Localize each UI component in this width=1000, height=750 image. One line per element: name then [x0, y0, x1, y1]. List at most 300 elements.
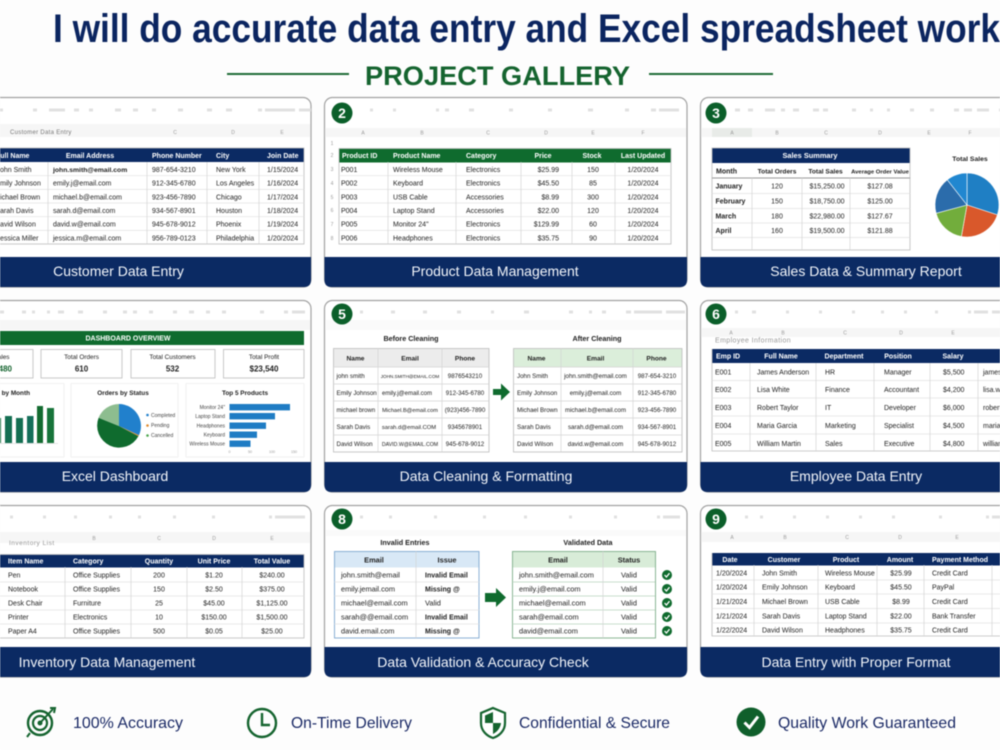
table: customers: michael.b@email.com [53, 194, 122, 201]
table: inventory: Paper A4 [8, 629, 37, 636]
pie chart: orders by status [71, 384, 178, 457]
table: employees: Developer [884, 405, 917, 412]
table: employees: Marketing [825, 423, 856, 430]
column letters: A [729, 330, 733, 336]
KPI cards: Total Orders [64, 354, 99, 361]
column letters and row numbers: 4 [331, 181, 334, 187]
table: sales summary: $18,750.00 [809, 198, 845, 206]
table: employees: $4,200 [943, 387, 965, 394]
bar chart: top 5 products [186, 384, 304, 457]
column letters: B [781, 330, 785, 336]
headings invalid and validated: Validated Data [563, 538, 614, 547]
table: inventory: $1.20 [205, 573, 223, 580]
table: products: Stock [582, 153, 602, 160]
table: products: Accessories [466, 194, 504, 201]
headings before and after: After Cleaning [572, 334, 622, 343]
table: orders: Sarah Davis [762, 614, 801, 621]
table: after cleaning: Email [587, 356, 604, 362]
headings before and after: Before Cleaning [383, 334, 439, 343]
table: inventory: Total Value [254, 558, 290, 566]
caption band [700, 462, 1000, 492]
table: employees: $4,800 [943, 441, 965, 448]
table: orders: Bank Transfer [932, 614, 976, 621]
icon: clock [248, 709, 276, 737]
table: customers: Philadelphia [216, 235, 254, 242]
table: validated data: Status [618, 556, 640, 564]
table: invalid entries: Issue [438, 556, 456, 564]
feature: 100% accuracy: 100% Accuracy [73, 715, 183, 732]
table: validated data: michael@email.com [519, 599, 586, 608]
table: inventory: Electronics [73, 615, 108, 622]
table: sales summary: Month [716, 168, 737, 176]
table: validated data: Valid [621, 627, 637, 636]
caption band [0, 647, 311, 677]
table: invalid entries: david.email.com [341, 627, 394, 636]
number badge 6 [706, 304, 726, 324]
table: customers: 945-678-9012 [152, 222, 196, 229]
table: customers: 923-456-7890 [152, 194, 196, 201]
table: employees: Executive [884, 441, 914, 448]
icon: target [27, 708, 55, 737]
table: inventory: $1,125.00 [256, 601, 288, 608]
column letters and row numbers: D [544, 130, 548, 136]
table: sales summary: 150 [771, 198, 783, 206]
table: before cleaning: JOHN.SMITH@EMAIL.COM [381, 374, 439, 379]
column letters [730, 130, 972, 136]
feature: 100% accuracy [27, 708, 183, 737]
table: orders: Michael Brown [762, 599, 808, 606]
table: products: P006 [341, 235, 357, 242]
column letters and row numbers: 8 [331, 236, 334, 242]
table: orders: Headphones [825, 628, 865, 635]
caption band: Data Cleaning & Formatting [400, 468, 572, 484]
table: orders: Payment Method [932, 557, 988, 564]
caption band [700, 647, 1000, 677]
table: sales summary: Sales Summary [782, 151, 838, 160]
table: before cleaning: emily.j@email.com [382, 391, 432, 397]
table: products: 1/20/2024 [627, 235, 659, 242]
feature: quality work guaranteed [736, 708, 956, 736]
table: products: Monitor 24" [393, 222, 429, 229]
table: employees: Salary [942, 354, 964, 360]
pie chart: orders by status: Completed [151, 413, 175, 419]
table: customers: New York [216, 167, 246, 174]
feature: on-time delivery: On-Time Delivery [291, 715, 412, 732]
table: employees: Manager [884, 370, 912, 377]
table: sales summary [712, 148, 910, 250]
table: products: Electronics [466, 181, 501, 188]
table: customers: Houston [216, 208, 242, 215]
table: employees: William Martin [757, 441, 801, 448]
table: products: P005 [341, 222, 357, 229]
bar chart: top 5 products: 150 [291, 450, 297, 454]
table: before cleaning: 9345678901 [448, 424, 483, 431]
table: customers: Phone Number [152, 153, 202, 160]
table: products: Price [534, 153, 552, 160]
column letters: D [231, 130, 235, 136]
caption band [700, 257, 1000, 287]
table: customers: 1/20/2024 [267, 235, 298, 242]
KPI cards: Total Customers [149, 354, 196, 361]
feature: confidential and secure [481, 708, 670, 738]
table: inventory: Printer [8, 615, 29, 622]
column letters and row numbers: B [420, 130, 424, 136]
table: employees: Emp ID [716, 354, 740, 360]
table: orders: 1/22/2024 [716, 628, 747, 635]
table: products: 85 [589, 181, 597, 188]
table: invalid entries: Valid [425, 599, 441, 608]
arrow: before to after [493, 384, 510, 400]
table: employees: Maria Garcia [757, 423, 797, 430]
table: inventory: Pen [8, 573, 21, 580]
panel: employee data entry [700, 300, 1000, 492]
column letters and row numbers: 2 [331, 153, 334, 159]
table: products: Product Name [393, 153, 441, 160]
table: orders: $8.99 [892, 599, 910, 606]
table: products: 1/20/2024 [627, 208, 659, 215]
table: inventory: Notebook [8, 587, 38, 594]
table: products: $8.99 [541, 194, 559, 201]
table: orders: John Smith [762, 571, 797, 578]
bar chart: top 5 products: 0 [228, 450, 230, 454]
table: customers: sarah.d@email.com [53, 208, 116, 215]
table: employees: Accountant [884, 387, 919, 394]
caption band: Customer Data Entry [53, 263, 184, 279]
table: customers: 934-567-8901 [152, 208, 196, 215]
column letters and row numbers: C [486, 130, 490, 136]
table: products: Electronics [466, 222, 501, 229]
column letters and row numbers: 7 [331, 222, 334, 228]
table: employees: Lisa White [757, 387, 790, 394]
table: orders: Amount [887, 557, 914, 564]
number badge 2: 2 [338, 105, 346, 121]
table: orders: Product [833, 557, 860, 564]
table: after cleaning: 934-567-8901 [638, 424, 677, 431]
table: customers: 1/18/2024 [267, 208, 298, 215]
table: before cleaning: Sarah Davis [336, 424, 370, 431]
caption band [324, 462, 687, 492]
table: inventory: Office Supplies [73, 573, 120, 580]
bar chart: top 5 products: 100 [269, 450, 275, 454]
column letters: C [824, 130, 828, 136]
table: after cleaning: John Smith [517, 373, 549, 380]
number badge 3 [706, 102, 726, 124]
table: customers: Join Date [267, 153, 299, 160]
table: employees: James Anderson [757, 370, 809, 377]
column letters: B [783, 535, 787, 541]
table: after cleaning: john.smith@email.com [563, 373, 627, 380]
column letters: C [173, 130, 177, 136]
table: products: P001 [341, 167, 357, 174]
table: employees: E003 [715, 405, 731, 412]
column letters and row numbers: 1 [331, 141, 334, 147]
table: orders: Wireless Mouse [825, 571, 875, 578]
column letters and row numbers: 5 [331, 195, 334, 201]
pie chart: orders by status: Pending [151, 423, 170, 429]
table: products: Category [466, 153, 496, 160]
table: customers: 912-345-6780 [152, 181, 196, 188]
table: inventory: $25.00 [261, 629, 283, 636]
column letters: A [730, 130, 734, 136]
table: customers: jessica.m@email.com [52, 235, 121, 242]
caption band: Employee Data Entry [790, 468, 922, 484]
table: before cleaning [334, 348, 489, 452]
table: employees: $6,000 [943, 405, 965, 412]
table: sales summary: Average Order Value [851, 170, 910, 176]
table: customers [0, 148, 304, 244]
table: customers: 956-789-0123 [152, 235, 196, 242]
sheet name: Customer Data Entry [10, 130, 72, 136]
table: before cleaning: DAVID.W@EMAIL.COM [382, 442, 438, 448]
table: employees: Position [884, 354, 912, 360]
table: validated data: Valid [621, 599, 637, 608]
table: inventory: Item Name [8, 558, 44, 566]
section heading: project gallery: PROJECT GALLERY [365, 61, 630, 91]
table: products: $129.99 [534, 222, 559, 229]
panel: sales data and summary report [700, 98, 1000, 287]
table: before cleaning: (923)456-7890 [445, 407, 486, 414]
table: before cleaning: Emily Johnson [336, 390, 377, 397]
pie chart: orders by status: Orders by Status [97, 390, 149, 397]
column letters: B [92, 536, 96, 542]
table: inventory: 500 [153, 629, 165, 636]
table: customers: david.w@email.com [53, 222, 116, 229]
table: after cleaning: Name [528, 356, 546, 362]
table: validated data: sarah@email.com [519, 613, 579, 622]
table: inventory [0, 554, 304, 638]
caption band: Data Entry with Proper Format [761, 654, 951, 670]
table: inventory: $45.00 [203, 601, 225, 608]
table: employees: E001 [715, 370, 731, 377]
column letters: D [899, 330, 903, 336]
table: inventory: 200 [153, 573, 165, 580]
KPI cards: $23,540 [250, 364, 279, 374]
table: before cleaning: Phone [455, 356, 475, 362]
table: products: Keyboard [393, 181, 423, 188]
table: validated data: emily.j@email.com [519, 585, 581, 594]
table: before cleaning: michael brown [336, 408, 375, 414]
table: products: 1/20/2024 [627, 167, 659, 174]
table: products: Laptop Stand [393, 208, 435, 215]
feature: confidential and secure: Confidential & Secure [519, 715, 670, 732]
table: after cleaning: michael.b@email.com [565, 407, 626, 414]
pie chart: total sales: Total Sales [952, 156, 988, 163]
number badge 5: 5 [338, 306, 346, 322]
KPI cards [0, 350, 304, 378]
table: orders [712, 553, 1000, 636]
number badge 9 [706, 508, 726, 530]
bar chart: sales by month [0, 384, 64, 457]
table: sales summary: $125.00 [867, 198, 893, 206]
panel: data cleaning and formatting [324, 300, 687, 492]
column letters [173, 130, 284, 136]
table: orders: USB Cable [825, 599, 860, 606]
table: products: 120 [587, 208, 599, 215]
table: after cleaning: Sarah Davis [517, 424, 551, 431]
table: before cleaning: john smith [336, 373, 365, 380]
table: inventory: Office Supplies [73, 587, 120, 594]
table: products: 1/20/2024 [627, 181, 659, 188]
number badge 3: 3 [712, 105, 720, 121]
table: customers: john.smith@email.com [52, 167, 127, 174]
number badge 8: 8 [338, 511, 346, 527]
panel: product data management [324, 98, 687, 287]
bar chart: top 5 products: Monitor 24" [200, 405, 225, 411]
table: customers: Phoenix [216, 222, 242, 229]
caption band: Data Validation & Accuracy Check [377, 654, 590, 670]
table: sales summary: $127.67 [867, 214, 893, 220]
table: before cleaning: Michael.B@email.com [382, 408, 438, 414]
table: products: Last Updated [621, 153, 665, 160]
table: inventory: Category [73, 558, 103, 566]
feature: on-time delivery [248, 709, 412, 737]
table: before cleaning: 912-345-6780 [446, 390, 485, 397]
table: employees: $4,500 [943, 423, 965, 430]
KPI cards: 532 [166, 364, 180, 374]
column letters: E [955, 535, 959, 541]
pie chart: orders by status: Cancelled [151, 433, 173, 439]
table: customers: Chicago [216, 194, 242, 201]
table: employees: Sales [825, 441, 843, 448]
table: products: 1/20/2024 [627, 222, 659, 229]
pie chart: total sales [935, 156, 999, 237]
icons: valid checks [662, 570, 672, 636]
table: orders: David Wilson [762, 628, 803, 635]
table: customers: emily.j@email.com [53, 181, 111, 188]
table: products: 60 [589, 222, 597, 229]
table: employees: $5,500 [943, 370, 965, 377]
table: customers: 987-654-3210 [152, 167, 196, 174]
table: invalid entries: Missing @ [425, 629, 460, 636]
table: customers: City [216, 153, 229, 160]
table: after cleaning: Phone [646, 356, 667, 362]
table: employees: HR [825, 370, 835, 377]
table: inventory: $240.00 [259, 573, 285, 580]
headings invalid and validated: Invalid Entries [380, 538, 430, 547]
table: before cleaning: 9876543210 [448, 373, 483, 380]
panel: data validation and accuracy check [324, 506, 687, 677]
table: orders: Credit Card [932, 628, 968, 635]
table: after cleaning [514, 348, 682, 452]
table: employees: IT [825, 405, 832, 412]
table: before cleaning: sarah.d@email.COM [382, 425, 436, 431]
panel: excel dashboard [0, 300, 311, 492]
table: orders: 1/20/2024 [716, 571, 747, 578]
feature: quality work guaranteed: Quality Work Guaranteed [778, 715, 956, 732]
headings before and after [383, 334, 622, 343]
table: validated data: david@email.com [519, 627, 578, 636]
table: products: P003 [341, 194, 357, 201]
table: inventory: 25 [155, 601, 163, 608]
table: sales summary: January [716, 184, 742, 191]
table: inventory: Unit Price [198, 558, 230, 566]
column letters [730, 535, 959, 541]
table: products [339, 148, 671, 244]
bar chart: top 5 products: 50 [248, 450, 252, 454]
table: sales summary: 120 [771, 184, 783, 191]
table: after cleaning: 987-654-3210 [638, 373, 677, 380]
number badge 2 [332, 102, 352, 124]
table: products: P002 [341, 181, 357, 188]
column letters: B [775, 130, 779, 136]
table: validated data: Valid [621, 613, 637, 622]
table: products: P004 [341, 208, 357, 215]
table: inventory: Furniture [73, 601, 101, 608]
table: products: 1/20/2024 [627, 194, 659, 201]
caption band [0, 462, 311, 492]
table: sales summary: Total Orders [758, 168, 797, 176]
table: inventory: Desk Chair [8, 601, 43, 608]
column letters: A [730, 535, 734, 541]
caption band: Excel Dashboard [62, 468, 168, 484]
table: orders: Credit Card [932, 599, 968, 606]
table: orders: PayPal [932, 585, 955, 592]
table: after cleaning: emily.j@email.com [570, 390, 621, 397]
table: inventory: 150 [153, 587, 165, 594]
table: orders: Credit Card [932, 571, 968, 578]
table: customers: 1/15/2024 [267, 167, 298, 174]
table: validated data: Valid [621, 571, 637, 580]
bar chart: top 5 products: Keyboard [204, 432, 225, 438]
KPI cards: Total Profit [249, 354, 279, 361]
caption band [324, 647, 687, 677]
table: invalid entries: Invalid Email [425, 615, 468, 622]
number badge 8 [332, 508, 352, 530]
column letters: E [270, 536, 274, 542]
table: invalid entries: sarah@@email.com [341, 613, 408, 622]
caption band: Product Data Management [411, 263, 579, 279]
table: products: Product ID [342, 153, 377, 160]
table: orders: $25.99 [890, 571, 912, 578]
table: sales summary: $121.88 [867, 228, 893, 235]
table: after cleaning: david.w@email.com [568, 441, 623, 448]
table: products: 300 [587, 194, 599, 201]
table: inventory: Office Supplies [73, 629, 120, 636]
table: validated data: Email [548, 556, 568, 564]
bar chart: top 5 products: Headphones [197, 424, 225, 430]
table: employees: Department [825, 354, 864, 360]
column letters: C [843, 330, 847, 336]
column letters [729, 330, 955, 336]
table: before cleaning: David Wilson [336, 441, 373, 448]
table: sales summary: $22,980.00 [809, 214, 845, 220]
table: employees [712, 349, 1000, 451]
column letters: F [968, 130, 972, 136]
sheet title: Inventory List [9, 540, 55, 547]
table: employees: Robert Taylor [757, 405, 799, 412]
table: validated data [512, 552, 656, 638]
table: inventory: $375.00 [259, 587, 285, 594]
table: inventory: $1,500.00 [256, 615, 288, 622]
table: orders: Keyboard [825, 585, 855, 592]
table: customers: 1/19/2024 [267, 222, 298, 229]
table: orders: Date [722, 557, 738, 564]
table: inventory: 10 [155, 615, 163, 622]
table: products: $22.00 [538, 208, 559, 215]
number badge 9: 9 [712, 511, 720, 527]
table: after cleaning: 945-678-9012 [638, 441, 677, 448]
KPI cards: 610 [75, 364, 89, 374]
table: after cleaning: 923-456-7890 [638, 407, 677, 414]
bar chart: top 5 products: Laptop Stand [195, 414, 225, 420]
table: customers: Email Address [66, 153, 114, 160]
table: orders: Emily Johnson [762, 585, 808, 592]
table: validated data: Valid [621, 585, 637, 594]
bar chart: top 5 products: Wireless Mouse [189, 442, 225, 448]
column letters: E [927, 130, 931, 136]
table: products: 150 [587, 167, 599, 174]
table: employees: E005 [715, 441, 731, 448]
